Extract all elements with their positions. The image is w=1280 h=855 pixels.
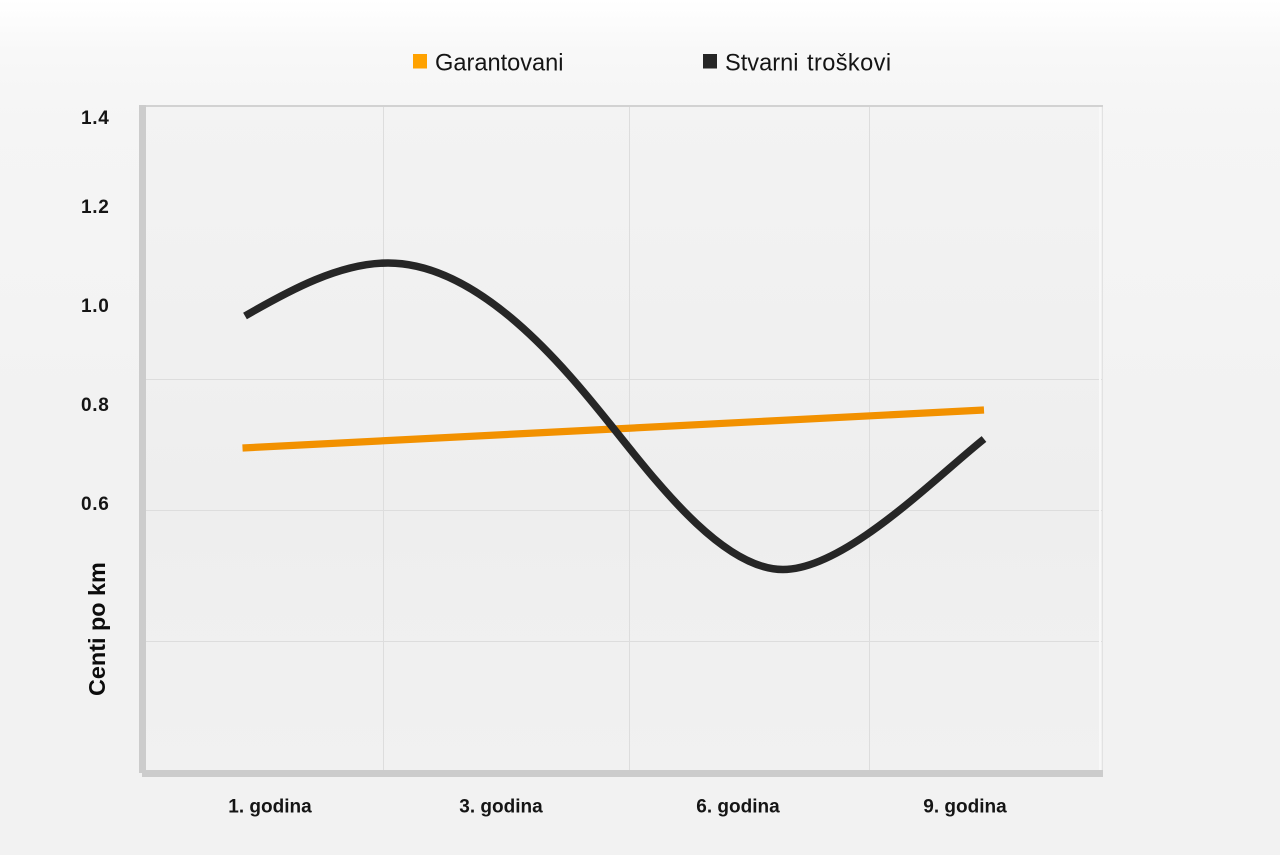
- series: garantovani: [242, 410, 984, 448]
- x axis labels: 3. godina: [459, 796, 543, 818]
- plot area: [146, 107, 1102, 770]
- legend: Stvarni troškovi: [725, 50, 892, 76]
- y axis title: Centi po km: [84, 562, 110, 696]
- y axis labels: 1.2: [81, 197, 110, 218]
- legend: [413, 50, 892, 76]
- axis frame: [139, 105, 1103, 777]
- y axis labels: 0.8: [81, 395, 110, 416]
- x axis labels: [228, 796, 1007, 818]
- x axis labels: 9. godina: [923, 796, 1007, 818]
- x axis labels: 1. godina: [228, 796, 312, 818]
- y axis labels: 1.4: [81, 108, 110, 129]
- y axis labels: 0.6: [81, 494, 110, 515]
- y axis labels: 1.0: [81, 296, 110, 317]
- series: stvarni troskovi: [245, 263, 984, 570]
- y axis labels: [81, 108, 110, 515]
- x axis labels: 6. godina: [696, 796, 780, 818]
- legend: Garantovani: [435, 50, 564, 76]
